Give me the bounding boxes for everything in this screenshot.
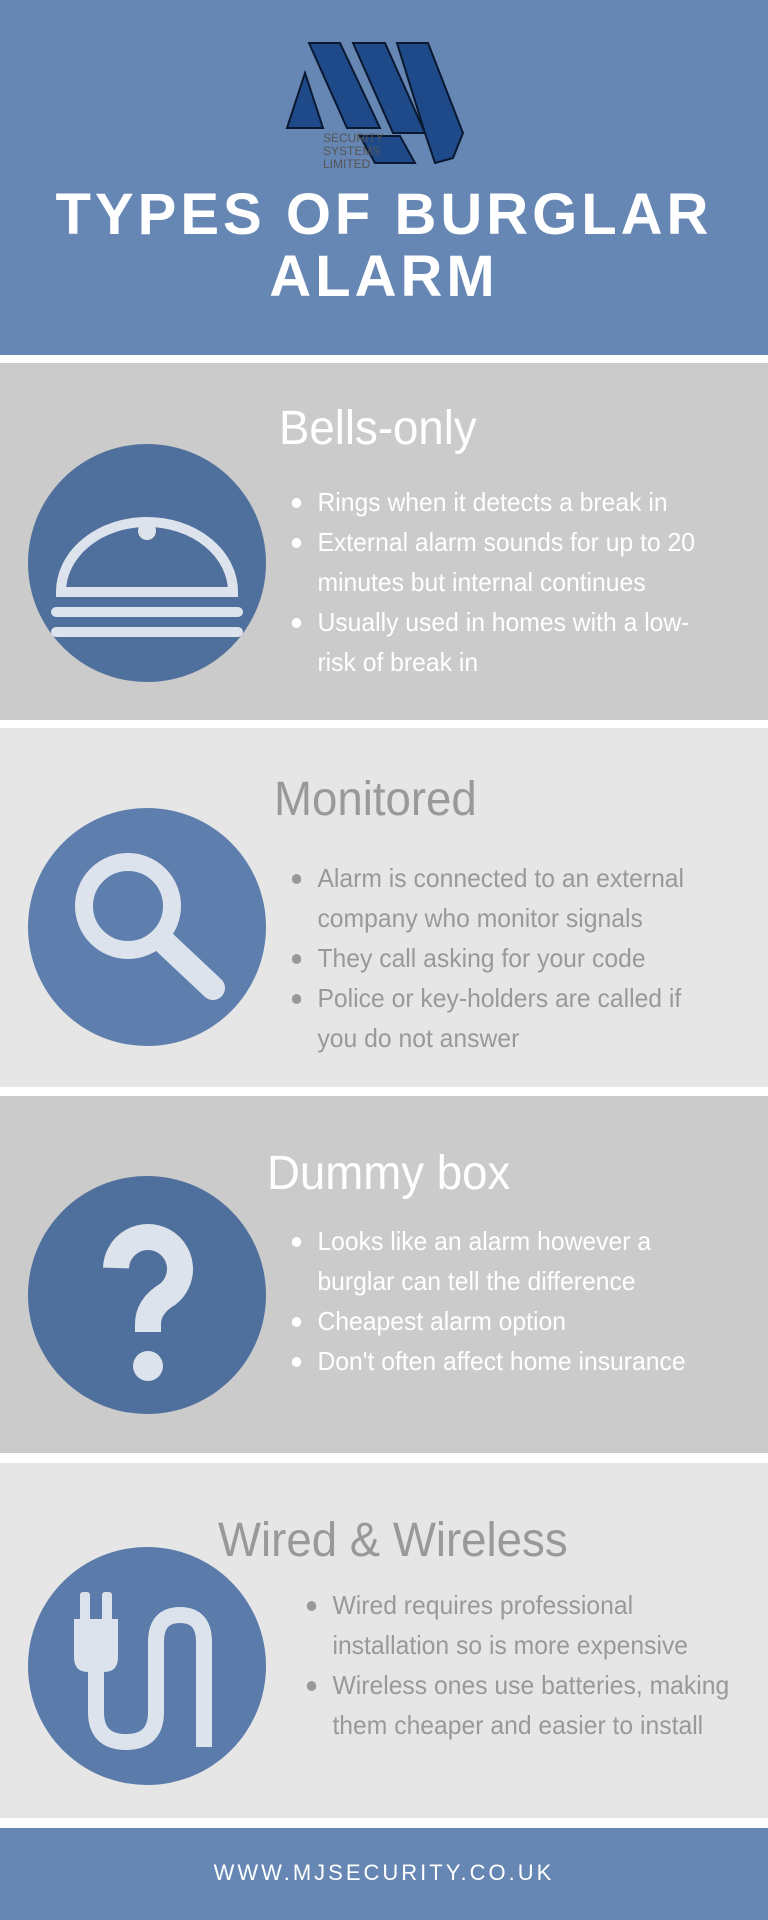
bullets: Usually used in homes with a low- xyxy=(317,607,689,637)
bullets: Police or key-holders are called if xyxy=(317,983,681,1013)
logo: SECURITY xyxy=(323,131,384,145)
footer url: WWW.MJSECURITY.CO.UK xyxy=(214,1860,554,1885)
bullets: Alarm is connected to an external xyxy=(317,863,684,893)
title xyxy=(56,182,712,309)
bullets xyxy=(292,1226,686,1376)
title: ALARM xyxy=(269,244,499,309)
bullets: External alarm sounds for up to 20 xyxy=(317,527,695,557)
bullets: Don't often affect home insurance xyxy=(317,1346,686,1376)
bullets: them cheaper and easier to install xyxy=(332,1710,703,1740)
bullets: company who monitor signals xyxy=(317,903,643,933)
icon: magnifier xyxy=(28,808,266,1046)
bullets: Rings when it detects a break in xyxy=(317,487,668,517)
bullets: you do not answer xyxy=(317,1023,519,1053)
bullets xyxy=(292,487,695,677)
bullets: Cheapest alarm option xyxy=(317,1306,566,1336)
icon: plug xyxy=(28,1547,266,1785)
title: TYPES OF BURGLAR xyxy=(56,182,712,247)
bullets: They call asking for your code xyxy=(317,943,646,973)
panel: dummy box xyxy=(0,1096,768,1453)
bullets: installation so is more expensive xyxy=(332,1630,688,1660)
heading: Wired & Wireless xyxy=(218,1514,568,1567)
heading: Bells-only xyxy=(279,402,477,455)
heading: Dummy box xyxy=(267,1147,510,1200)
panel: wired & wireless xyxy=(0,1463,768,1818)
panel: monitored xyxy=(0,728,768,1087)
heading: Monitored xyxy=(274,773,477,826)
bullets: minutes but internal continues xyxy=(317,567,646,597)
panel: bells-only xyxy=(0,363,768,720)
bullets: Wired requires professional xyxy=(332,1590,633,1620)
bullets xyxy=(306,1590,729,1740)
bullets: Wireless ones use batteries, making xyxy=(332,1670,729,1700)
header xyxy=(0,0,768,355)
logo xyxy=(286,42,464,171)
bullets xyxy=(292,863,684,1053)
logo: LIMITED xyxy=(323,157,371,171)
icon: question mark xyxy=(28,1176,266,1414)
logo: SYSTEMS xyxy=(323,144,380,158)
icon: bell cloche xyxy=(28,444,266,682)
footer xyxy=(0,1828,768,1920)
bullets: burglar can tell the difference xyxy=(317,1266,636,1296)
bullets: Looks like an alarm however a xyxy=(317,1226,651,1256)
bullets: risk of break in xyxy=(317,647,478,677)
